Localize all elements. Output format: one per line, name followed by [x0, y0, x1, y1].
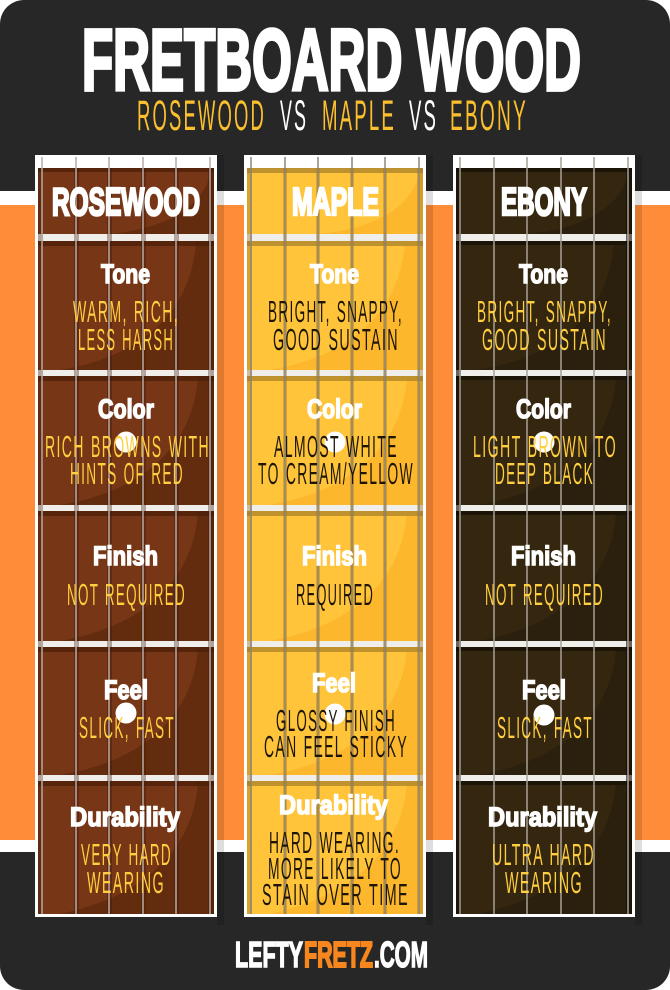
cell: finish: Finish	[511, 541, 576, 571]
column: maple: BRIGHT, SNAPPY,	[268, 294, 403, 329]
cell: feel	[264, 668, 408, 764]
column: maple: GLOSSY FINISH	[276, 703, 396, 738]
column: maple: TO CREAM/YELLOW	[258, 456, 414, 491]
subtitle: MAPLE	[322, 92, 396, 140]
cell: color	[258, 394, 414, 491]
heading: ebony: EBONY	[501, 181, 587, 224]
text: RICH BROWNS WITH	[45, 429, 210, 464]
cell: durability: WEARING	[505, 865, 583, 900]
cell: feel: Feel	[312, 668, 356, 698]
column: maple: CAN FEEL STICKY	[264, 729, 408, 764]
cell: tone	[73, 259, 179, 357]
cell: tone	[477, 259, 612, 357]
fret dot	[534, 432, 554, 452]
footer: website: .COM	[374, 934, 428, 975]
cell: color	[473, 394, 617, 491]
cell: durability	[488, 802, 597, 900]
cell: feel	[79, 675, 175, 745]
column: maple: HARD WEARING.	[269, 825, 400, 860]
column: rosewood: NOT REQUIRED	[67, 577, 186, 612]
column: rosewood: VERY HARD	[81, 837, 172, 872]
cell: finish	[485, 541, 604, 612]
fret dot	[116, 702, 136, 724]
fret dot	[324, 704, 346, 724]
cell: tone: Tone	[519, 259, 568, 289]
cell: tone	[268, 259, 403, 357]
column: rosewood: SLICK, FAST	[79, 710, 175, 745]
cell: tone: Tone	[101, 259, 150, 289]
cell: durability: Durability	[488, 802, 597, 832]
column: ebony	[453, 155, 642, 925]
column: maple	[244, 155, 433, 925]
cell: durability: Durability	[279, 790, 388, 820]
cell: finish	[67, 541, 186, 612]
cell: durability: WEARING	[87, 865, 165, 900]
cell: color	[45, 394, 210, 491]
cell: color: ALMOST WHITE	[274, 429, 398, 464]
column: maple: STAIN OVER TIME	[262, 877, 409, 912]
cell: durability: Durability	[70, 802, 180, 832]
cell: finish	[296, 541, 374, 612]
footer: website	[235, 934, 428, 975]
fret dot	[534, 704, 554, 726]
cell: feel	[497, 675, 593, 745]
cell: feel: Feel	[522, 675, 566, 705]
footer: website: FRETZ	[304, 934, 373, 975]
cell: color: Color	[98, 394, 154, 424]
cell: finish: Finish	[302, 541, 367, 571]
column: maple: MORE LIKELY TO	[268, 851, 402, 886]
column: maple: REQUIRED	[296, 577, 374, 612]
subtitle: VS	[280, 92, 308, 140]
cell: tone: Tone	[310, 259, 359, 289]
footer: website: LEFTY	[235, 934, 303, 975]
text: EBONY	[450, 92, 528, 140]
column: rosewood: LESS HARSH	[78, 322, 174, 357]
subtitle: VS	[409, 92, 438, 140]
cell: finish: Finish	[93, 541, 158, 571]
cell: durability	[262, 790, 409, 912]
column: maple: GOOD SUSTAIN	[273, 322, 399, 357]
cell: color: HINTS OF RED	[70, 456, 184, 491]
column: rosewood: WARM, RICH,	[73, 294, 179, 329]
heading: maple: MAPLE	[292, 181, 379, 224]
heading: rosewood: ROSEWOOD	[52, 181, 200, 224]
fret dot	[116, 432, 136, 452]
cell: color: Color	[307, 394, 362, 424]
cell: durability	[70, 802, 180, 900]
column: rosewood	[35, 155, 224, 925]
subtitle: ROSEWOOD	[137, 92, 266, 140]
cell: color: Color	[516, 394, 571, 424]
fret dot	[324, 432, 346, 452]
cell: feel: Feel	[104, 675, 148, 705]
